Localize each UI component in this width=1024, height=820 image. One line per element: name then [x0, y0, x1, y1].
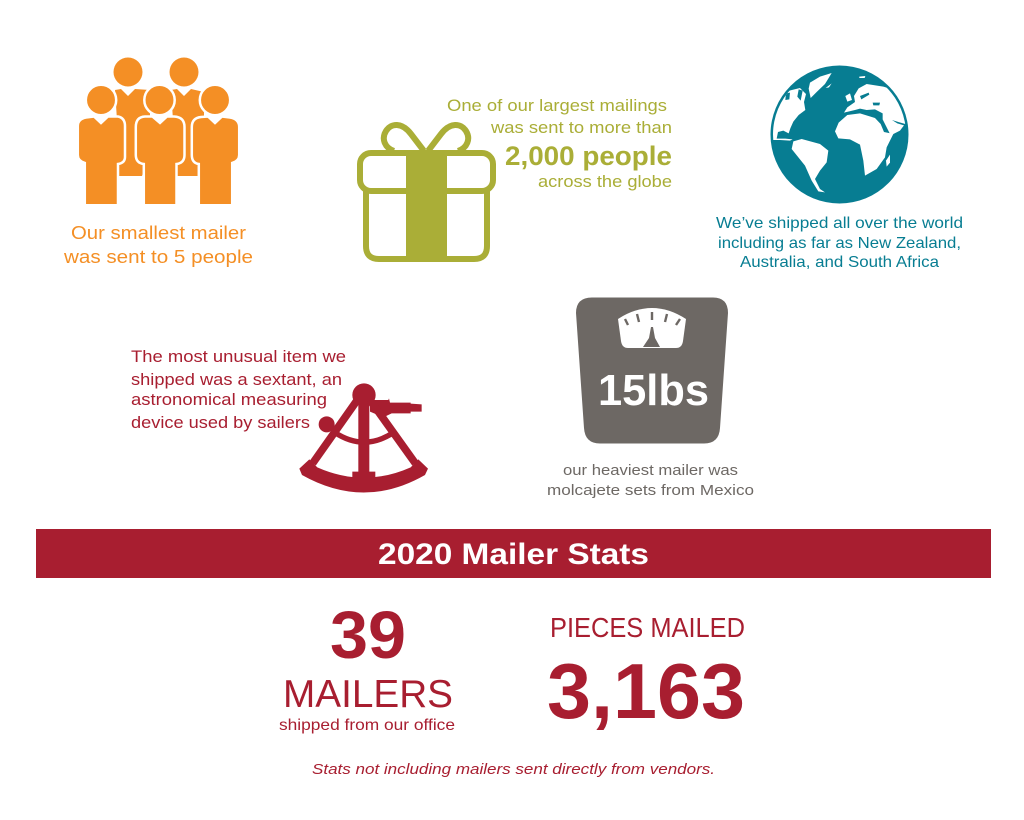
text: heaviest mailer caption: molcajete sets from Mexico: [547, 482, 754, 499]
text: sextant caption: device used by sailers: [131, 413, 310, 432]
stat: 39 mailers: 39: [330, 598, 406, 673]
footnote: Stats not including mailers sent directly from vendors.: [312, 761, 715, 778]
stat: 39 mailers: [279, 598, 455, 734]
stat: pieces mailed: PIECES MAILED: [550, 612, 745, 643]
text: largest mailing caption: [447, 96, 672, 191]
panel: smallest mailer: [63, 58, 253, 267]
text: smallest mailer caption: Our smallest mailer: [71, 223, 246, 243]
stat: pieces mailed: 3,163: [547, 647, 745, 735]
text: largest mailing caption: 2,000 people: [505, 141, 672, 171]
stat: 39 mailers: MAILERS: [283, 673, 453, 716]
panel: heaviest mailer: [547, 298, 754, 499]
icon: sextant: [299, 383, 428, 492]
text: 15lbs: 15lbs: [598, 366, 709, 415]
text: worldwide caption: We’ve shipped all over the world: [716, 215, 963, 232]
icon: group of five people: [78, 58, 239, 205]
text: sextant caption: shipped was a sextant, an: [131, 370, 342, 389]
text: sextant caption: astronomical measuring: [131, 390, 327, 409]
text: heaviest mailer caption: our heaviest mailer was: [563, 462, 738, 479]
banner: 2020 Mailer Stats: 2020 Mailer Stats: [378, 538, 649, 571]
text: sextant caption: [131, 347, 346, 432]
banner: 2020 Mailer Stats: [36, 529, 991, 578]
text: largest mailing caption: across the globe: [538, 172, 672, 191]
text: smallest mailer caption: [63, 223, 253, 267]
text: worldwide caption: [716, 215, 963, 271]
icon: globe: [767, 66, 917, 204]
text: smallest mailer caption: was sent to 5 people: [63, 247, 253, 267]
text: largest mailing caption: One of our largest mailings: [447, 96, 667, 115]
text: largest mailing caption: was sent to more than: [490, 118, 672, 137]
icon: scale with weight: [576, 298, 728, 444]
text: worldwide caption: including as far as New Zealand,: [718, 235, 961, 252]
text: heaviest mailer caption: [547, 462, 754, 499]
panel: most unusual item: [131, 347, 428, 492]
text: sextant caption: The most unusual item we: [131, 347, 346, 366]
stat: 39 mailers: shipped from our office: [279, 717, 455, 734]
icon: scale dial: [618, 308, 686, 348]
panel: shipped worldwide: [716, 66, 963, 271]
panel: largest mailing: [360, 96, 672, 260]
text: worldwide caption: Australia, and South Africa: [740, 254, 939, 271]
icon: gift box: [360, 125, 493, 260]
